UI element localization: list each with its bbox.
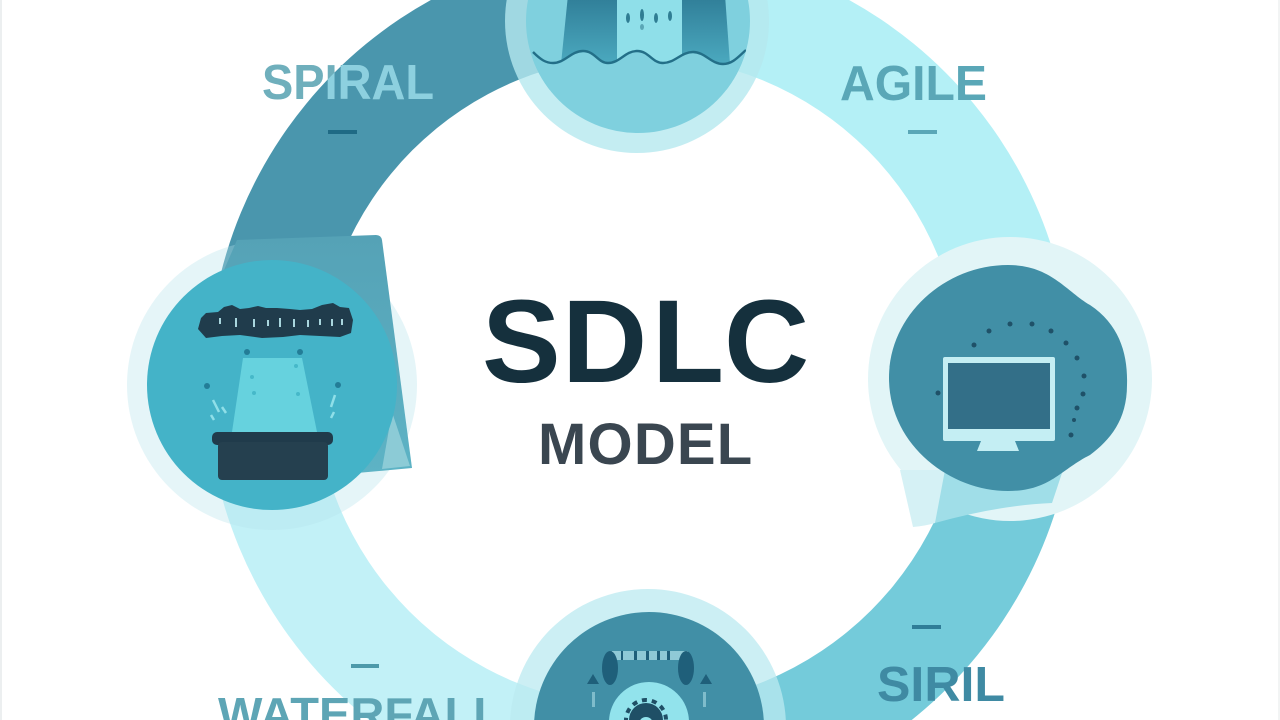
dash: siril: [912, 625, 941, 629]
label: spiral: SPIRAL: [262, 56, 434, 110]
title: SDLC: SDLC: [482, 276, 809, 408]
icon: dark cloud panel: [198, 303, 353, 338]
icon: dotted arc: [936, 322, 1086, 438]
dash: spiral: [328, 130, 357, 134]
icon: tower and wave: [533, 0, 746, 90]
label: spiral: SPIRAL: [262, 56, 434, 110]
icon: dark tray: [212, 432, 333, 480]
paper flap behind the disc: [224, 235, 412, 473]
icon: light beam: [232, 358, 317, 432]
pale flap on white: [900, 470, 944, 527]
ring segment: spiral: [222, 0, 538, 271]
ring segment: siril: [756, 514, 1055, 720]
blob disc: [889, 265, 1127, 491]
icon: machine with gear: [587, 651, 712, 720]
label: spiral: [263, 64, 433, 100]
label: agile: AGILE: [840, 57, 987, 111]
label: siril: SIRIL: [877, 658, 1005, 712]
node: bottom, gear: [510, 589, 786, 720]
subtitle: MODEL: MODEL: [538, 412, 753, 477]
node: right, monitor: [868, 237, 1152, 527]
dash: agile: [908, 130, 937, 134]
ring segment: waterfall: [222, 494, 540, 720]
lightened band under the blob: [935, 470, 1063, 523]
dash: waterfall: [351, 664, 379, 668]
icon: monitor: [943, 357, 1055, 451]
node: top, waterfall tower: [505, 0, 769, 153]
node: left, spray: [127, 235, 417, 530]
ring segment: agile: [738, 0, 1050, 256]
